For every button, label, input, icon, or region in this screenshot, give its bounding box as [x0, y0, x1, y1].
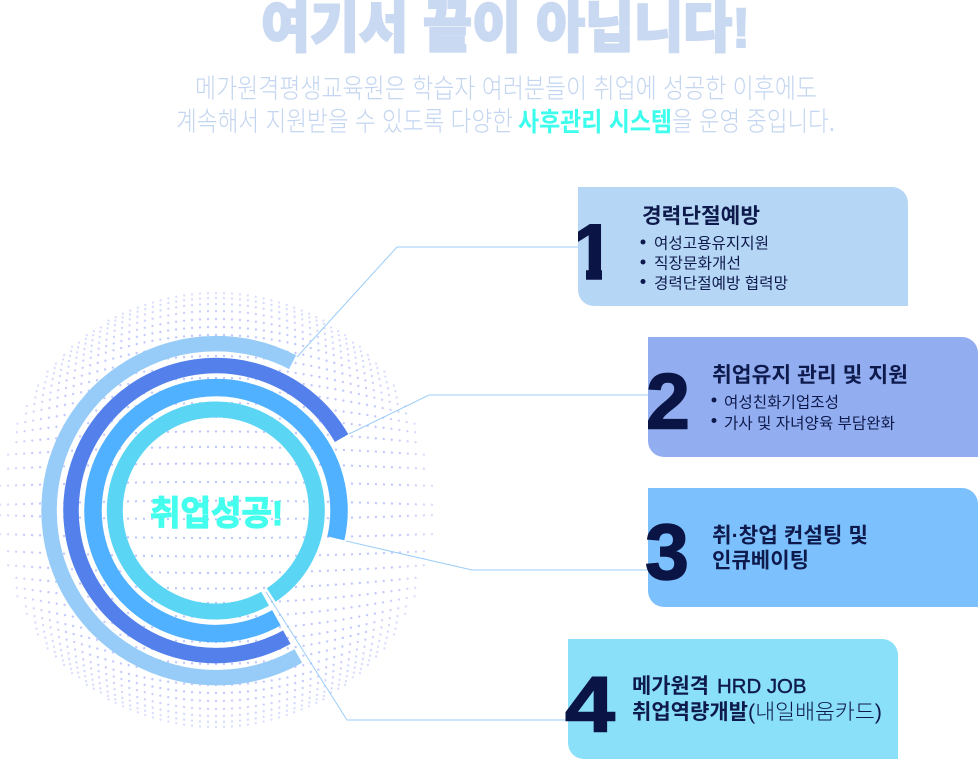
panel: card 4 — [565, 639, 898, 759]
panel: card 3 — [645, 488, 978, 607]
number 4: 4 — [565, 660, 615, 748]
connector line 4 — [266, 592, 568, 720]
number 2: 2 — [646, 356, 690, 446]
card 1 list: 경력단절예방 협력망 — [654, 274, 788, 292]
number 1: 1 — [571, 207, 615, 296]
card 2 list: 가사 및 자녀양육 부담완화 — [724, 414, 895, 432]
card 3 heading: 취·창업 컨설팅 및 — [712, 524, 868, 548]
card 1 list: 직장문화개선 — [654, 254, 741, 272]
card 2 list: 여성친화기업조성 — [724, 394, 839, 412]
ring 4 — [115, 410, 317, 612]
card 4 heading: 취업역량개발 — [632, 701, 748, 724]
subtitle text block: 계속해서 지원받을 수 있도록 다양한 — [176, 107, 513, 137]
panel: card 1 — [571, 187, 908, 306]
subtitle text block — [176, 74, 835, 137]
subtitle text block: 메가원격평생교육원은 학습자 여러분들이 취업에 성공한 이후에도 — [195, 74, 817, 104]
ring 2 — [71, 366, 342, 656]
card 4 heading: (내일배움카드) — [748, 701, 882, 724]
card 4 heading: 메가원격 — [632, 675, 709, 698]
card 1 heading: 경력단절예방 — [642, 205, 760, 228]
subtitle text block: 을 운영 중입니다. — [672, 107, 835, 137]
connector line 1 — [297, 247, 578, 357]
card 2 heading: 취업유지 관리 및 지원 — [712, 364, 908, 387]
subtitle text block: 사후관리 시스템 — [518, 107, 672, 137]
dotted globe background — [0, 293, 434, 727]
card 2 list — [712, 394, 895, 432]
card 4 heading: HRD JOB — [717, 676, 806, 698]
number 3: 3 — [645, 507, 689, 596]
card 1 list: 여성고용유지지원 — [654, 234, 769, 252]
card 3 heading: 인큐베이팅 — [712, 550, 809, 572]
panel: card 2 — [646, 337, 978, 457]
card 4 heading — [632, 675, 882, 724]
ring 1 — [49, 344, 298, 678]
ring 3 — [93, 388, 339, 634]
connector line 3 — [346, 541, 648, 570]
concentric ring chart — [49, 344, 342, 678]
card 3 heading — [712, 524, 868, 572]
connector line 2 — [349, 395, 648, 434]
card 1 list — [640, 234, 788, 292]
center label: 취업성공! — [150, 495, 283, 533]
